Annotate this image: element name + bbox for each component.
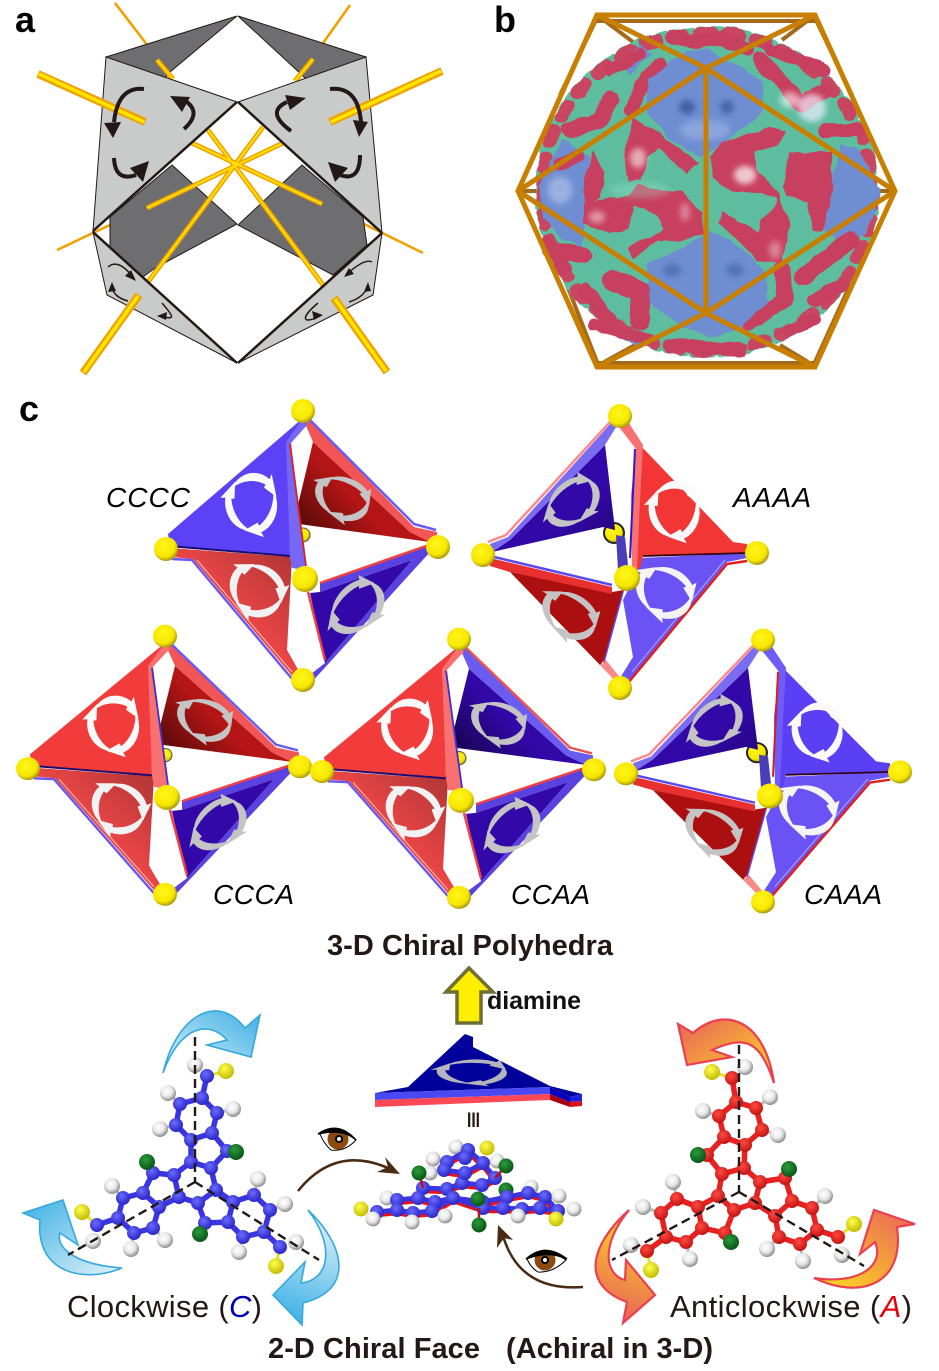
polyhedron CCAA — [310, 628, 606, 909]
central crossing rods — [147, 59, 323, 285]
thin back rods — [57, 3, 423, 253]
icon: eye lower — [526, 1250, 567, 1272]
light front faces — [93, 57, 382, 363]
polyhedron CCCC — [154, 399, 450, 692]
curved rotation arrows upper faces — [114, 89, 361, 177]
rear hydrogens — [623, 1059, 850, 1263]
heading: Achiral in 3-D: (Achiral in 3-D) — [506, 1333, 713, 1365]
label b: b — [494, 0, 516, 40]
capsid surface — [537, 30, 880, 354]
label CCCC: CCCC — [106, 482, 191, 513]
label CCCA: CCCA — [213, 879, 294, 910]
eye viewing arrow upper — [298, 1128, 400, 1191]
arrow: yellow diamine arrow — [446, 968, 493, 1023]
rear frame struts — [518, 15, 895, 363]
dashed axes red molecule — [612, 1045, 864, 1266]
red rotation arrows — [596, 1019, 915, 1323]
III symbol: III — [467, 1109, 480, 1132]
arrow lower — [497, 1225, 583, 1287]
front frame struts — [518, 15, 895, 367]
blue rotation arrows — [23, 1011, 339, 1325]
label AAAA: AAAA — [731, 482, 811, 513]
label clockwise: Clockwise (C) — [67, 1289, 262, 1324]
atoms and bonds — [74, 1063, 293, 1274]
panel b: virus capsid in icosidodecahedron frame — [494, 0, 895, 367]
chiral triangular plate — [375, 1034, 582, 1107]
atoms and bonds red — [635, 1064, 862, 1278]
thick front edges — [93, 102, 382, 363]
heading: 2-D Chiral Face: 2-D Chiral Face — [268, 1333, 480, 1365]
polyhedron CCCA — [16, 625, 312, 906]
label a: a — [15, 0, 36, 40]
thick yellow rods — [38, 71, 442, 373]
stacked molecule side view — [354, 1140, 582, 1232]
polyhedron AAAA — [471, 404, 769, 700]
molecule: anticlockwise A form — [596, 1019, 915, 1323]
label diamine: diamine — [487, 987, 581, 1015]
arrow upper — [298, 1157, 400, 1191]
label CCAA: CCAA — [511, 879, 590, 910]
panel c label: c — [19, 388, 39, 429]
dark rear faces — [106, 16, 367, 277]
icon: eye upper — [318, 1128, 356, 1150]
label CAAA: CAAA — [804, 879, 882, 910]
curved rotation arrows lower faces — [108, 261, 372, 320]
rear hydrogens — [85, 1057, 304, 1250]
polyhedron CAAA — [614, 628, 912, 914]
label anticlockwise: Anticlockwise (A) — [670, 1289, 912, 1324]
molecule: clockwise C form — [23, 1011, 339, 1325]
dashed symmetry axes — [68, 1037, 319, 1260]
heading: 3-D Chiral Polyhedra: 3-D Chiral Polyhedra — [327, 930, 614, 962]
panel a: polyhedron diagram — [15, 0, 442, 373]
eye viewing arrow lower — [497, 1225, 583, 1287]
capsid highlights — [548, 92, 826, 277]
